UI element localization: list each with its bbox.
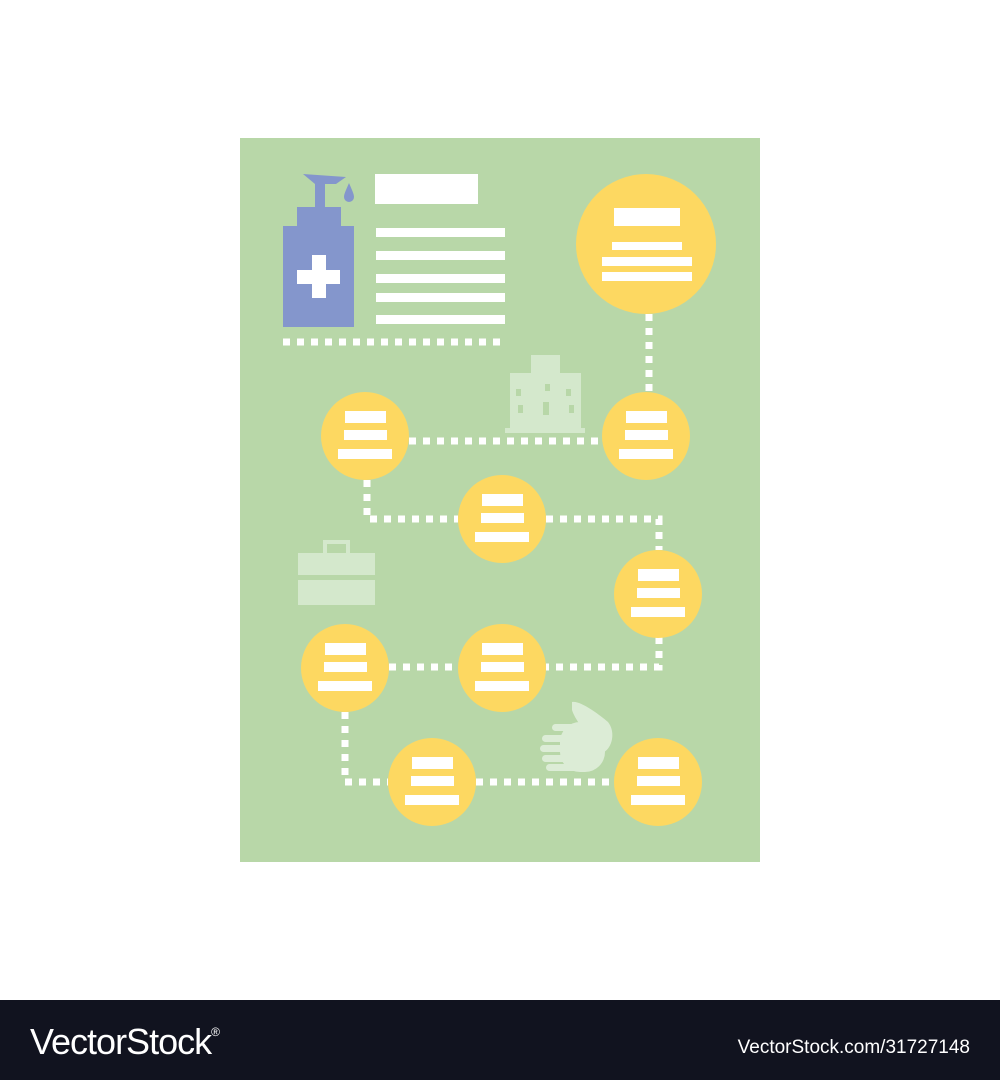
- icon: building: [505, 355, 585, 433]
- footer bar: VectorStock: [30, 1021, 211, 1062]
- circles: steps: [301, 392, 702, 826]
- icon: hands: [540, 702, 612, 772]
- footer bar: [0, 1000, 1000, 1080]
- dotted connectors: [283, 314, 659, 782]
- panel: green poster: [240, 138, 760, 862]
- text block: header: [375, 174, 505, 324]
- footer bar: ®: [211, 1025, 220, 1039]
- footer bar: VectorStock.com/31727148: [738, 1037, 970, 1058]
- icon: briefcase: [298, 540, 375, 605]
- circle: main: [576, 174, 716, 314]
- icon: sanitizer bottle: [283, 174, 354, 327]
